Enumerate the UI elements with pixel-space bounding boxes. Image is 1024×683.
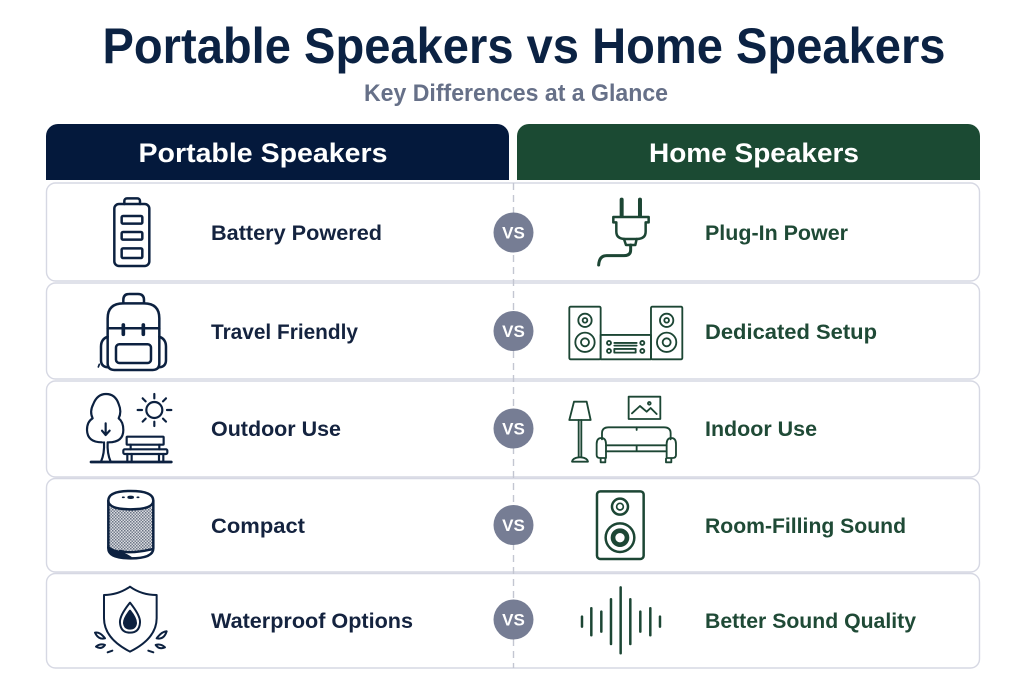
vs badge 5: VS [502,610,525,630]
row 3 [87,394,817,462]
header: home speakers [517,124,980,180]
vs badge 4: VS [502,516,525,535]
icon: plug [599,200,649,265]
row 4 [108,491,906,559]
label: dedicated setup: Dedicated Setup [705,321,877,344]
header: portable speakers [46,124,509,180]
title: Portable Speakers vs Home Speakers [102,18,946,74]
label: waterproof options: Waterproof Options [211,610,413,633]
label: outdoor use: Outdoor Use [211,418,341,441]
label: room-filling sound: Room-Filling Sound [705,515,906,538]
icon: backpack [98,294,166,370]
vs badge 2: VS [502,322,525,341]
vs badge 3: VS [502,420,525,438]
label: indoor use: Indoor Use [705,418,817,441]
vs badge 1: VS [502,224,525,242]
label: plug-in power: Plug-In Power [705,222,848,245]
vs badge 2 [494,311,534,351]
vs badge 3 [494,408,534,448]
label: battery powered: Battery Powered [211,222,382,245]
vs badge 5 [494,600,534,640]
vs badges [494,212,534,640]
label: compact: Compact [211,515,305,538]
row 1 [114,198,848,266]
icon: sound wave [582,587,660,653]
header: home speakers: Home Speakers [649,138,859,168]
icon: bookshelf speaker [597,491,644,559]
icon: park tree, sun and bench [87,394,171,462]
label: travel friendly: Travel Friendly [211,321,358,344]
row 2 [98,294,877,370]
icon: waterproof shield [95,587,167,652]
vs badge 1 [494,212,534,252]
subtitle: Key Differences at a Glance [364,80,668,107]
label: better sound quality: Better Sound Quality [705,610,916,633]
header: portable speakers: Portable Speakers [138,138,388,168]
centre dashed divider [512,183,514,668]
icon: lamp, sofa and picture [569,397,676,462]
icon: compact speaker [108,491,153,558]
table rows outline [46,183,980,668]
icon: stereo system [569,307,682,359]
row 5 [95,587,916,653]
icon: battery [114,198,149,266]
vs badge 4 [494,505,534,545]
